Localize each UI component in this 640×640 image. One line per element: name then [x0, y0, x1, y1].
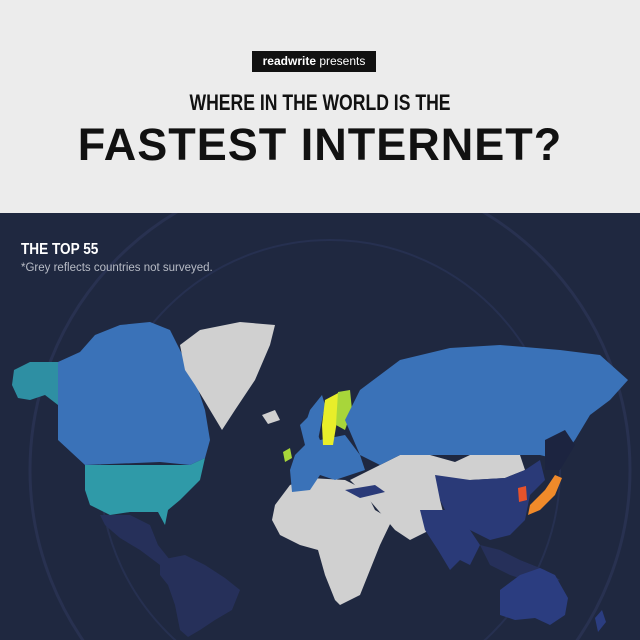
map panel — [0, 213, 640, 640]
east asia dark — [545, 430, 575, 470]
header panel — [0, 0, 640, 213]
india & se asia — [420, 510, 480, 570]
world map — [12, 322, 628, 637]
new zealand — [595, 610, 606, 632]
scandinavia — [305, 395, 325, 440]
finland — [336, 390, 352, 430]
australia — [500, 568, 568, 625]
alaska — [12, 362, 58, 405]
greenland — [180, 322, 275, 430]
title: FASTEST INTERNET? — [78, 119, 562, 170]
mexico & central america — [100, 515, 170, 565]
south america — [160, 555, 240, 637]
china — [435, 460, 545, 540]
africa — [272, 478, 392, 605]
sweden — [322, 392, 340, 445]
korea — [518, 486, 527, 502]
ireland — [283, 448, 292, 462]
note: *Grey reflects countries not surveyed. — [21, 262, 213, 274]
subtitle: WHERE IN THE WORLD IS THE — [189, 90, 451, 115]
badge: readwrite presents — [252, 51, 376, 72]
russia — [345, 345, 628, 465]
heading: the top 55: THE TOP 55 — [21, 241, 98, 258]
europe — [290, 415, 365, 492]
canada — [58, 322, 210, 465]
middle east + central asia + mongolia — [350, 455, 525, 540]
badge: readwrite presents: readwrite presents — [263, 54, 365, 68]
japan — [528, 475, 562, 515]
usa — [85, 458, 205, 525]
turkey — [345, 485, 385, 498]
iceland — [262, 410, 280, 424]
